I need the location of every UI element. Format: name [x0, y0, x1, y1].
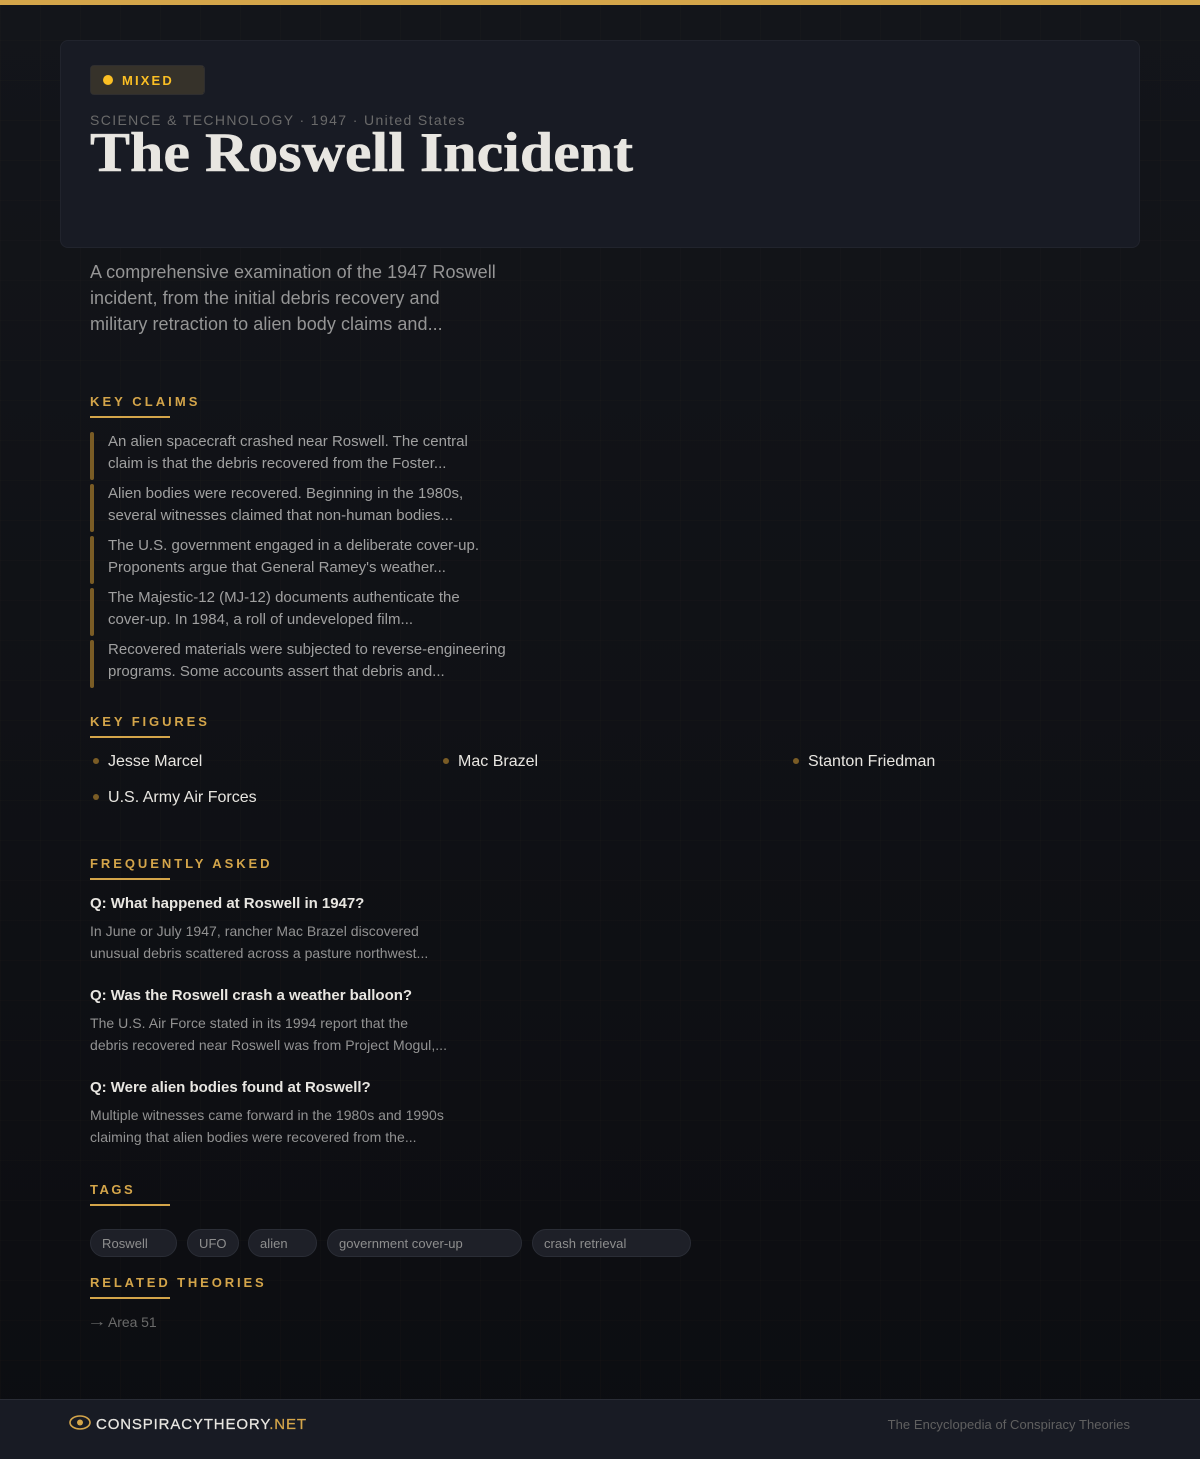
claim 5: Recovered materials were subjected to reverse-engineering: [108, 641, 506, 658]
summary text: incident, from the initial debris recovery and: [90, 288, 440, 308]
tag: alien: alien: [260, 1236, 288, 1251]
related link: Area 51: Area 51: [108, 1314, 157, 1330]
figure: Jesse Marcel: Jesse Marcel: [108, 753, 202, 770]
tag: Roswell: Roswell: [102, 1236, 148, 1251]
claim 3: Proponents argue that General Ramey's weather...: [108, 559, 446, 576]
claim 1: claim is that the debris recovered from the Foster...: [108, 455, 446, 472]
faq 3: Multiple witnesses came forward in the 1980s and 1990s: [90, 1107, 444, 1123]
tag: government cover-up: [327, 1229, 522, 1257]
faq 3: claiming that alien bodies were recovered from the...: [90, 1129, 417, 1145]
faq 3: Q: Were alien bodies found at Roswell?: [90, 1079, 371, 1096]
claim 4: [90, 588, 460, 636]
section: key claims heading: KEY CLAIMS: [90, 394, 200, 409]
faq 1: Q: What happened at Roswell in 1947?: [90, 895, 364, 912]
summary text: A comprehensive examination of the 1947 Roswell: [90, 262, 496, 282]
category and date line: SCIENCE & TECHNOLOGY · 1947 · United States: [90, 112, 466, 128]
faq 1: In June or July 1947, rancher Mac Brazel discovered: [90, 923, 419, 939]
section: frequently asked heading: FREQUENTLY ASKED: [90, 856, 273, 871]
summary text: [90, 262, 496, 334]
faq 2: debris recovered near Roswell was from Project Mogul,...: [90, 1037, 447, 1053]
figure: Mac Brazel: Mac Brazel: [458, 753, 538, 770]
claim 2: Alien bodies were recovered. Beginning in the 1980s,: [108, 485, 463, 502]
claim 2: [90, 484, 463, 532]
claim 2: several witnesses claimed that non-human bodies...: [108, 507, 453, 524]
faq 2: [90, 987, 447, 1053]
figure: Stanton Friedman: Stanton Friedman: [808, 753, 935, 770]
claim 1: [90, 432, 468, 480]
claim 4: cover-up. In 1984, a roll of undeveloped film...: [108, 611, 413, 628]
claim 4: The Majestic-12 (MJ-12) documents authenticate the: [108, 589, 460, 606]
section: key figures heading: KEY FIGURES: [90, 714, 210, 729]
tag: Roswell: [90, 1229, 177, 1257]
badge label: MIXED: [122, 73, 174, 88]
panel: hero header: [60, 40, 1140, 248]
claim 5: [90, 640, 506, 688]
tag: UFO: UFO: [199, 1236, 227, 1251]
summary text: military retraction to alien body claims and...: [90, 314, 443, 334]
icon: eye logo: [69, 1415, 91, 1430]
tag: government cover-up: government cover-up: [339, 1236, 463, 1251]
badge: mixed verdict: [90, 65, 205, 95]
claim 5: programs. Some accounts assert that debris and...: [108, 663, 445, 680]
faq 2: The U.S. Air Force stated in its 1994 report that the: [90, 1015, 408, 1031]
tag: crash retrieval: crash retrieval: [544, 1236, 626, 1251]
figure: U.S. Army Air Forces: U.S. Army Air Forces: [108, 789, 257, 806]
related link: Area 51: →: [87, 1313, 107, 1329]
icon: verdict dot: [103, 75, 113, 85]
faq 1: unusual debris scattered across a pasture northwest...: [90, 945, 428, 961]
footer tagline: The Encyclopedia of Conspiracy Theories: [888, 1417, 1130, 1432]
title: The Roswell Incident: [90, 122, 633, 184]
tag: UFO: [187, 1229, 239, 1257]
claim 3: [90, 536, 479, 584]
tag: alien: [248, 1229, 317, 1257]
faq 2: Q: Was the Roswell crash a weather balloon?: [90, 987, 412, 1004]
logo wordmark: CONSPIRACYTHEORY.NET: [96, 1416, 307, 1433]
related link: Area 51: [87, 1313, 157, 1330]
faq 3: [90, 1079, 444, 1145]
section: related theories heading: RELATED THEORIES: [90, 1275, 267, 1290]
faq 1: [90, 895, 428, 961]
section: tags heading: TAGS: [90, 1182, 135, 1197]
tag: crash retrieval: [532, 1229, 691, 1257]
claim 3: The U.S. government engaged in a deliberate cover-up.: [108, 537, 479, 554]
footer bar: [0, 1399, 1200, 1459]
claim 1: An alien spacecraft crashed near Roswell. The central: [108, 433, 468, 450]
